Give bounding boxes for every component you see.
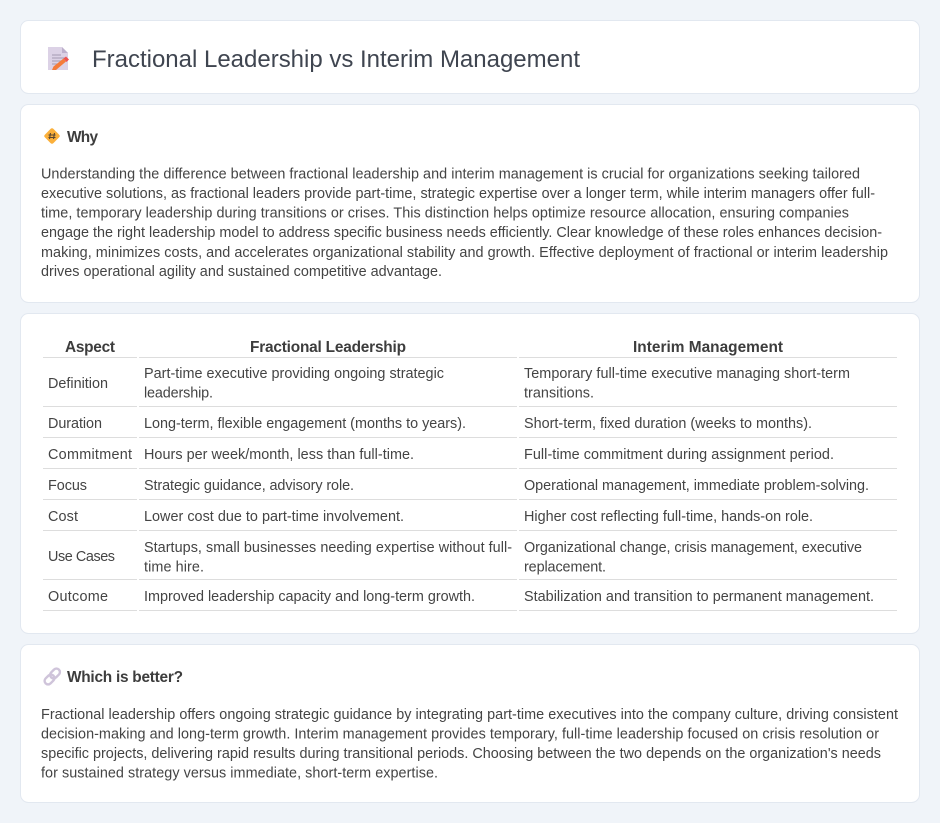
icon: chain link (43, 667, 61, 686)
row: duration: Short-term, fixed duration (weeks to months). (524, 416, 812, 432)
icon: memo with pencil (48, 47, 69, 70)
row: duration: Long-term, flexible engagement (months to years). (144, 416, 466, 432)
text block: which is better explanation: Fractional leadership offers ongoing strategic guidance by integrating part-time executives into the company culture, driving consistent (41, 707, 898, 723)
row: use cases: Startups, small businesses needing expertise without full- (144, 540, 512, 556)
row: use cases (43, 540, 897, 580)
table header row: Aspect (65, 339, 115, 356)
panel: comparison table (20, 314, 920, 634)
text block: why explanation: engage the right leadership model to address specific business needs efficiently. Clear knowledge of these roles enhances decision- (41, 225, 882, 241)
row: outcome: Improved leadership capacity and long-term growth. (144, 589, 475, 605)
row: use cases: Use Cases (48, 549, 115, 565)
text block: why explanation: making, minimizes costs, and accelerates organizational stability and growth. Effective deployment of fractional or interim leadership (41, 245, 888, 261)
row: outcome (43, 589, 897, 610)
row: cost (43, 509, 897, 530)
panel: why (20, 104, 920, 302)
row: commitment: Commitment (48, 447, 132, 463)
row: focus: Focus (48, 478, 87, 494)
row: definition: leadership. (144, 386, 213, 402)
table header row: Fractional Leadership (250, 339, 406, 356)
text block: which is better explanation: decision-making and long-term growth. Interim management provides temporary, full-time leadership focused on crisis resolution or (41, 726, 879, 742)
heading: which is better: Which is better? (67, 669, 183, 686)
text block: which is better explanation: for sustained strategy versus immediate, short-term expertise. (41, 765, 438, 781)
row: use cases: replacement. (524, 560, 606, 576)
row: focus: Operational management, immediate problem-solving. (524, 478, 869, 494)
row: duration (43, 416, 897, 438)
panel: which is better (20, 644, 920, 802)
row: definition (43, 366, 897, 406)
table header row: Interim Management (633, 339, 783, 356)
row: cost: Higher cost reflecting full-time, hands-on role. (524, 509, 813, 525)
row: duration: Duration (48, 416, 102, 432)
row: cost: Lower cost due to part-time involvement. (144, 509, 404, 525)
row: definition: transitions. (524, 386, 594, 402)
row: commitment (43, 447, 897, 468)
icon: warning diamond (44, 128, 60, 144)
row: outcome: Outcome (48, 589, 108, 605)
row: focus: Strategic guidance, advisory role. (144, 478, 354, 494)
row: commitment: Hours per week/month, less than full-time. (144, 447, 414, 463)
header panel (20, 20, 920, 94)
text block: why explanation: drives operational agility and sustained competitive advantage. (41, 264, 442, 280)
row: definition: Definition (48, 376, 108, 392)
text block: why explanation: executive solutions, as fractional leaders provide part-time, strategic expertise over a longer term, while interim managers offer full- (41, 186, 875, 202)
row: commitment: Full-time commitment during assignment period. (524, 447, 834, 463)
text block: which is better explanation: specific projects, delivering rapid results during transitional periods. Choosing between the two depends on the organization's needs (41, 746, 881, 762)
table header row (43, 339, 897, 358)
row: definition: Temporary full-time executive managing short-term (524, 366, 850, 382)
row: cost: Cost (48, 509, 78, 525)
text block: why explanation (41, 166, 888, 280)
row: use cases: Organizational change, crisis management, executive (524, 540, 862, 556)
title: Fractional Leadership vs Interim Management (92, 46, 580, 73)
text block: why explanation: Understanding the difference between fractional leadership and interim management is crucial for organizations seeking tailored (41, 166, 860, 182)
row: focus (43, 478, 897, 500)
text block: why explanation: time, temporary leadership during transitions or crises. This distinction helps optimize resource allocation, ensuring companies (41, 206, 849, 222)
row: outcome: Stabilization and transition to permanent management. (524, 589, 874, 605)
row: use cases: time hire. (144, 560, 204, 576)
heading: why: Why (67, 129, 98, 146)
row: definition: Part-time executive providing ongoing strategic (144, 366, 444, 382)
text block: which is better explanation (41, 707, 898, 781)
